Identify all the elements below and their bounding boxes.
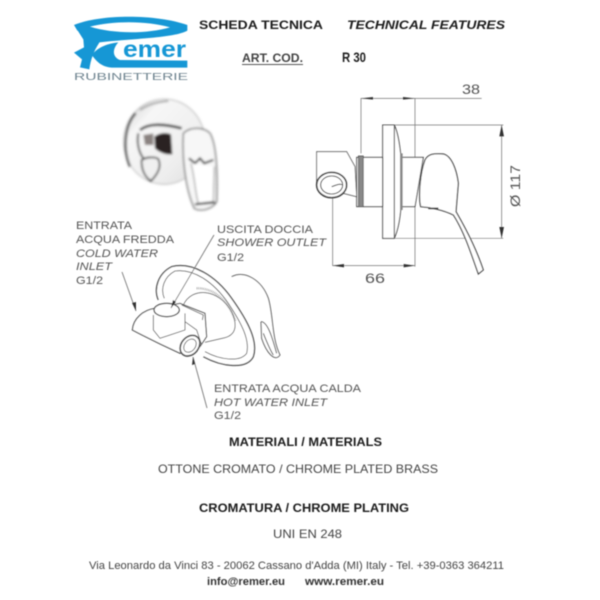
logo mark <box>74 17 187 69</box>
logo wordmark: emer <box>123 36 186 62</box>
text: chrome plated brass: OTTONE CROMATO / CHROME PLATED BRASS <box>158 462 438 476</box>
leader: shower outlet <box>171 235 214 308</box>
label: hot water inlet: G1/2 <box>214 410 241 422</box>
round plate <box>156 266 255 365</box>
heading: technical features: TECHNICAL FEATURES <box>347 18 505 32</box>
label: shower outlet: SHOWER OUTLET <box>217 237 327 249</box>
footer: email: info@remer.eu <box>207 576 285 588</box>
logo: Remer Rubinetterie <box>74 17 188 83</box>
label: cold water inlet: ENTRATA <box>76 220 133 232</box>
dimension lines <box>333 97 504 267</box>
footer: address: Via Leonardo da Vinci 83 - 20062 Cassano d'Adda (MI) Italy - Tel. +39-0363 364211 <box>89 560 504 572</box>
shower outlet <box>154 303 179 317</box>
body <box>357 157 383 207</box>
hot water inlet <box>176 331 204 360</box>
outlet connector <box>317 152 357 197</box>
heading: materials: MATERIALI / MATERIALS <box>229 435 382 449</box>
leader: cold water inlet <box>122 272 136 311</box>
label: cold water inlet: G1/2 <box>76 275 103 287</box>
label: cold water inlet: ACQUA FREDDA <box>76 234 175 246</box>
dimension: 38: 38 <box>462 81 480 97</box>
label: shower outlet <box>217 224 327 264</box>
label: cold water inlet: INLET <box>76 261 113 273</box>
label: hot water inlet: HOT WATER INLET <box>214 397 328 409</box>
article code label: ART. COD. <box>242 51 303 65</box>
technical drawing: side view with dimensions <box>317 97 504 274</box>
heading: chrome plating: CROMATURA / CHROME PLATING <box>199 501 409 515</box>
label: hot water inlet <box>214 383 362 422</box>
label: cold water inlet: COLD WATER <box>76 248 158 260</box>
wall plate <box>383 125 401 238</box>
lever behind <box>232 275 280 358</box>
product photo: chrome mixer <box>124 99 217 210</box>
threaded body <box>183 293 235 342</box>
heading: scheda tecnica: SCHEDA TECNICA <box>199 18 323 32</box>
dimension: 66: 66 <box>365 270 385 286</box>
isometric drawing: connections view <box>132 266 280 365</box>
lever handle <box>420 154 483 274</box>
label: shower outlet: G1/2 <box>217 252 244 264</box>
label: hot water inlet: ENTRATA ACQUA CALDA <box>214 383 362 395</box>
dimension: diameter 117: Ø 117 <box>507 165 523 207</box>
footer: website: www.remer.eu <box>304 576 384 588</box>
leader: hot water inlet <box>192 357 207 408</box>
label: cold water inlet <box>76 220 175 287</box>
text: standard: UNI EN 248 <box>273 527 342 541</box>
logo subtitle: RUBINETTERIE <box>74 71 188 83</box>
article code value: R 30 <box>342 49 366 65</box>
label: shower outlet: USCITA DOCCIA <box>217 224 314 236</box>
cold inlet body <box>132 303 207 353</box>
